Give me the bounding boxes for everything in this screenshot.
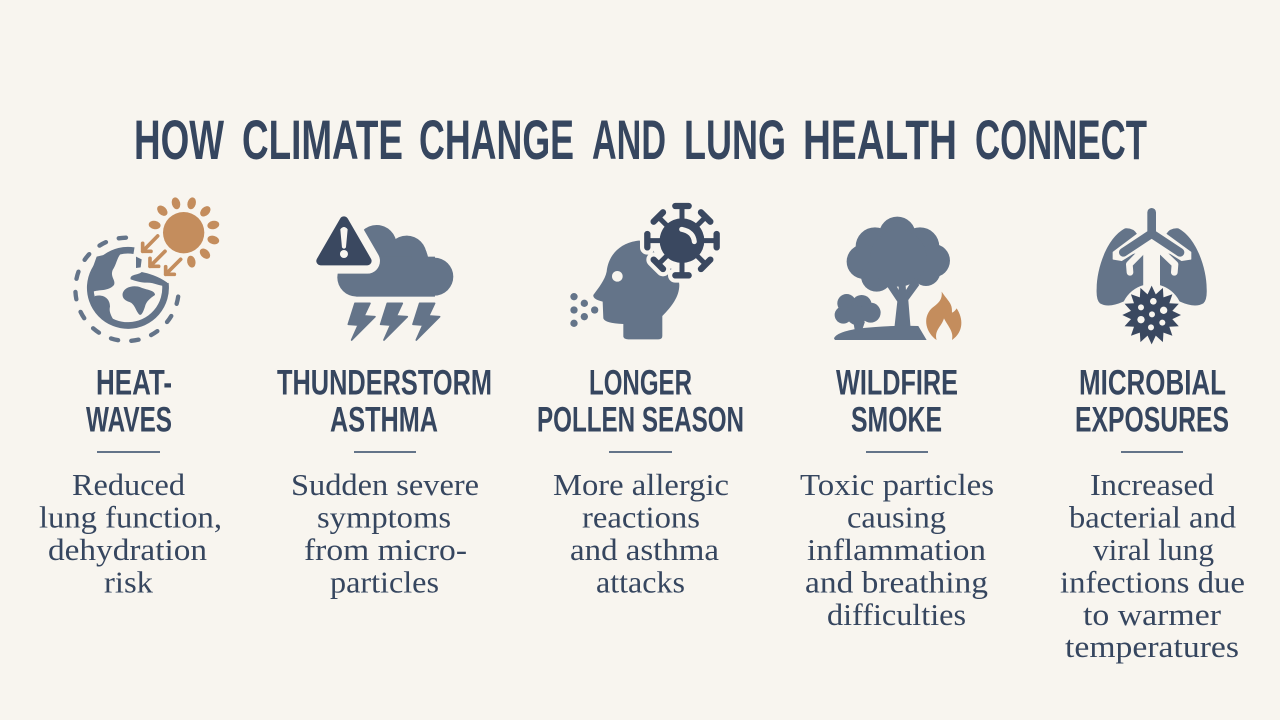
text: microbial description: to warmer: [1083, 597, 1222, 632]
icon: lungs with microbe: [1097, 212, 1207, 346]
text: microbial description: viral lung: [1093, 532, 1214, 567]
title: HEALTH: [803, 108, 957, 171]
panel: heat-waves: [39, 196, 222, 599]
icon: storm cloud with warning: [321, 221, 453, 340]
icon: sun heating earth: [75, 196, 220, 341]
text: microbial description: Increased: [1090, 467, 1215, 502]
title: HOW: [134, 108, 224, 171]
text: microbial description: temperatures: [1065, 629, 1239, 664]
text: microbial description: bacterial and: [1069, 500, 1237, 534]
text: thunderstorm description: from micro-: [304, 532, 467, 567]
text: heat-waves description: Reduced: [72, 467, 186, 502]
panel: microbial exposures: [1060, 212, 1245, 664]
heading: heat-waves: HEAT-: [96, 364, 172, 402]
icon: head with pollen and virus: [570, 206, 717, 339]
text: heat-waves description: risk: [104, 564, 154, 600]
heading: thunderstorm asthma: THUNDERSTORM: [277, 364, 492, 402]
text: thunderstorm description: Sudden severe: [291, 467, 479, 502]
title: CHANGE: [419, 108, 574, 171]
text: wildfire description: and breathing: [805, 564, 988, 600]
text: wildfire description: difficulties: [827, 597, 966, 632]
text: heat-waves description: dehydration: [48, 532, 208, 567]
text: thunderstorm description: symptoms: [317, 500, 451, 534]
text: heat-waves description: lung function,: [39, 500, 222, 534]
panel: thunderstorm asthma: [277, 221, 492, 600]
heading: microbial exposures: MICROBIAL: [1079, 364, 1226, 402]
icon: tree and flame: [834, 217, 961, 340]
text: pollen description: More allergic: [553, 467, 729, 502]
text: pollen description: attacks: [596, 564, 685, 600]
panel: wildfire smoke: [800, 217, 994, 632]
title: AND: [592, 108, 666, 171]
title: CONNECT: [975, 108, 1147, 171]
heading: wildfire smoke: SMOKE: [851, 400, 942, 440]
text: wildfire description: causing: [847, 500, 946, 534]
text: microbial description: infections due: [1060, 564, 1245, 600]
title: CLIMATE: [242, 108, 403, 171]
title: LUNG: [684, 108, 786, 171]
panel: longer pollen season: [537, 206, 744, 599]
heading: thunderstorm asthma: ASTHMA: [330, 400, 438, 440]
text: thunderstorm description: particles: [330, 564, 439, 600]
text: pollen description: reactions: [582, 500, 700, 534]
heading: longer pollen season: POLLEN SEASON: [537, 400, 744, 440]
text: wildfire description: inflammation: [807, 532, 987, 567]
text: wildfire description: Toxic particles: [800, 467, 994, 502]
text: pollen description: and asthma: [570, 532, 719, 567]
heading: wildfire smoke: WILDFIRE: [836, 364, 958, 402]
heading: longer pollen season: LONGER: [589, 364, 692, 402]
heading: heat-waves: WAVES: [86, 400, 172, 440]
